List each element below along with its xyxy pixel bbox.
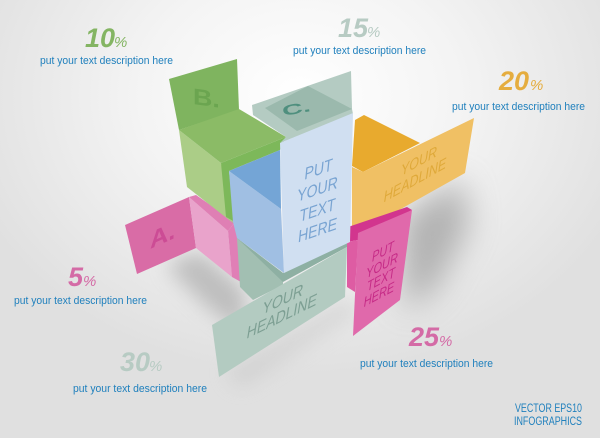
- stat: 30%: 30: [120, 347, 150, 377]
- label C: C.: [281, 98, 312, 119]
- stat: 20%: 20: [498, 66, 529, 96]
- stat: 10%: %: [114, 34, 127, 51]
- text: PUT: [304, 155, 334, 184]
- stat: 30%: put your text description here: [73, 383, 207, 395]
- text: TEXT: [299, 195, 336, 226]
- text: HERE: [364, 278, 394, 310]
- headline text: YOUR: [261, 279, 305, 319]
- stat: 30%: [73, 347, 207, 395]
- stat: 15%: put your text description here: [293, 45, 426, 57]
- headline text: HEADLINE: [245, 289, 319, 343]
- stat: 20%: [452, 66, 585, 113]
- text: YOUR: [296, 173, 339, 206]
- stat: 20%: %: [530, 77, 543, 94]
- stat: 25%: [360, 322, 493, 370]
- panel: lower grey-green block: [212, 238, 347, 377]
- panel: orange block: [352, 115, 474, 233]
- text: HERE: [297, 214, 338, 247]
- label A: A.: [150, 217, 175, 255]
- headline text: YOUR: [401, 144, 437, 180]
- stat: 5%: [14, 262, 147, 307]
- stat: 30%: %: [149, 358, 162, 375]
- footer caption: VECTOR EPS10: [515, 403, 582, 415]
- panel: blue block: [229, 113, 353, 273]
- stat: 25%: %: [439, 333, 452, 350]
- stat: 15%: [293, 13, 426, 57]
- headline text: HEADLINE: [384, 155, 446, 206]
- text: YOUR: [366, 249, 398, 282]
- stat: 5%: %: [83, 273, 96, 290]
- stat: 15%: 15: [338, 13, 369, 43]
- stat: 25%: 25: [408, 322, 440, 352]
- text: [296, 155, 339, 247]
- stat: 25%: put your text description here: [360, 358, 493, 370]
- stat: 10%: [40, 23, 173, 67]
- stat: 20%: put your text description here: [452, 101, 585, 113]
- stat: 5%: 5: [68, 262, 84, 292]
- footer caption: INFOGRAPHICS: [514, 416, 582, 428]
- stat: 15%: %: [367, 24, 380, 41]
- footer caption: [514, 403, 582, 428]
- panel: A pink block: [125, 195, 241, 282]
- text: PUT: [372, 237, 395, 265]
- panel: B green block: [169, 59, 286, 223]
- label B: B.: [193, 84, 220, 113]
- stat: 10%: put your text description here: [40, 55, 173, 67]
- text: [364, 237, 398, 310]
- panel: magenta block: [347, 207, 412, 336]
- panel: C grey-green block: [252, 71, 353, 143]
- stat: 10%: 10: [85, 23, 115, 53]
- stat: 5%: put your text description here: [14, 295, 147, 307]
- cast shadows: [165, 178, 470, 388]
- text: TEXT: [367, 264, 396, 295]
